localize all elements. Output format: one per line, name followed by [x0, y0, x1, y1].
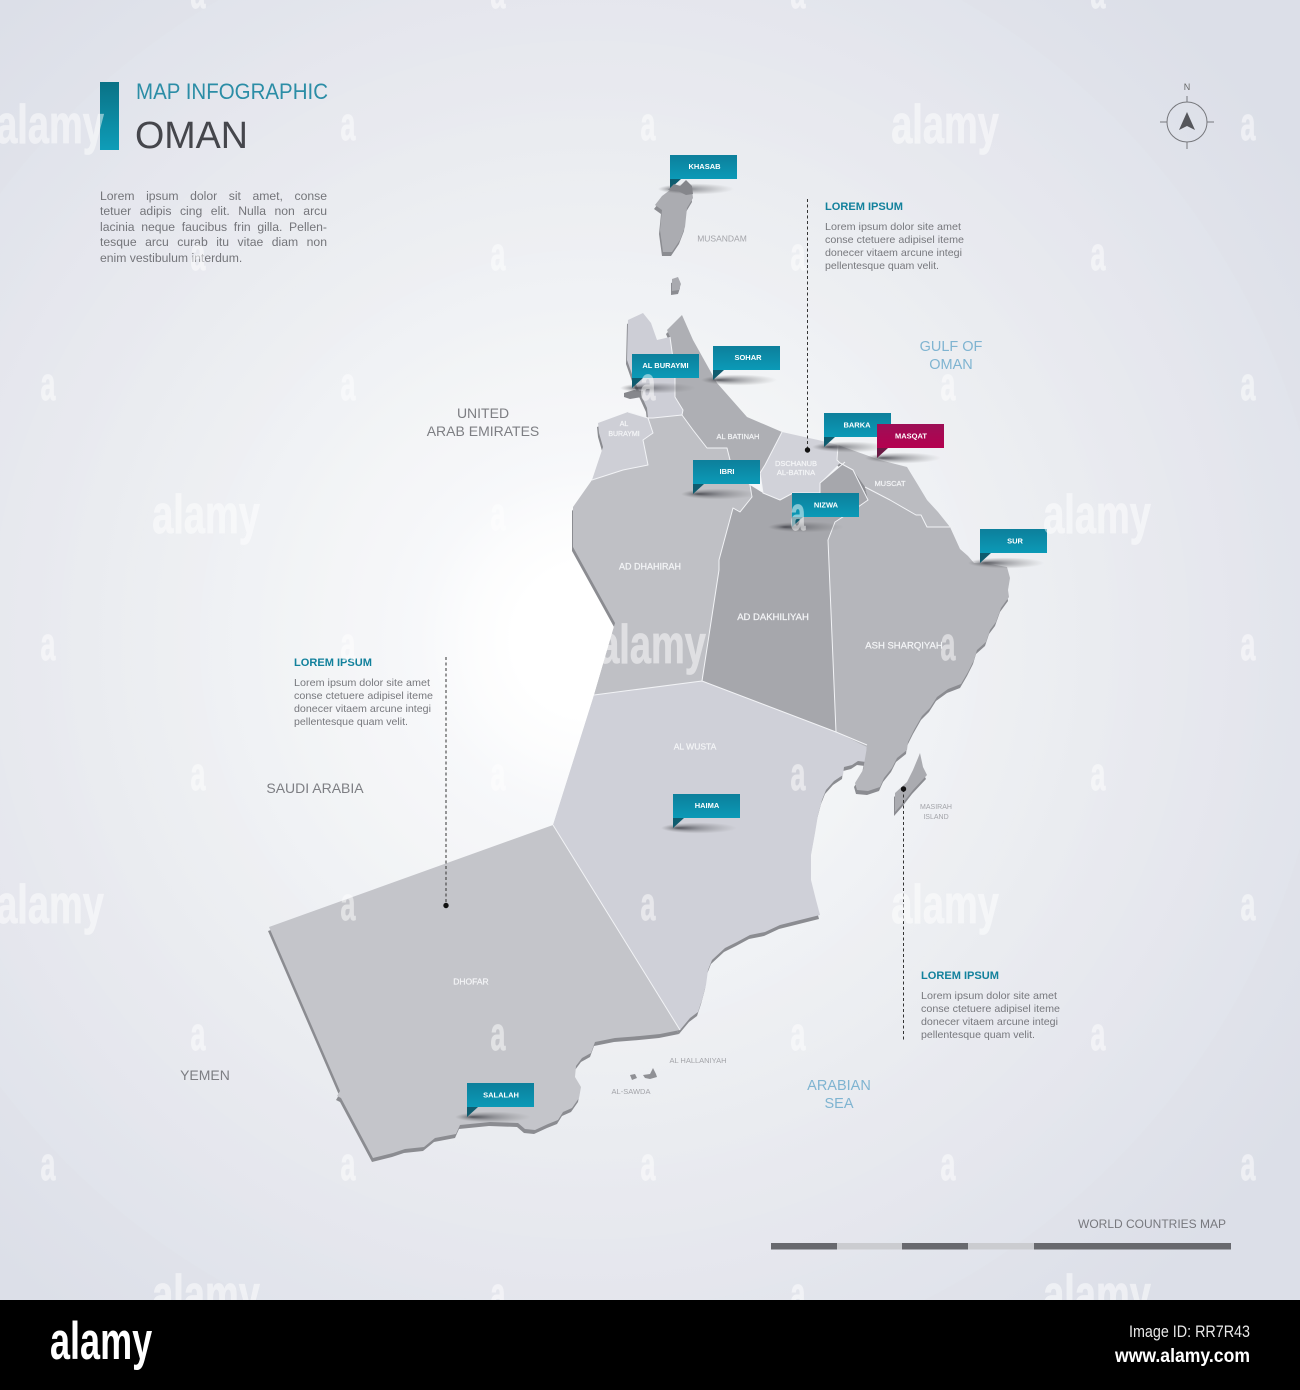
watermarks: a	[191, 1008, 206, 1061]
callout text: north: pellentesque quam velit.	[825, 261, 939, 272]
watermarks: a	[341, 358, 356, 411]
watermarks: a	[341, 878, 356, 931]
sea labels: OMAN	[929, 357, 973, 373]
pin: Barka: BARKA	[843, 420, 871, 430]
callout leader: north	[805, 199, 810, 453]
sea labels: ARABIAN	[807, 1078, 871, 1094]
watermarks: a	[641, 878, 656, 931]
island: Musandam south	[672, 277, 681, 291]
region: Al Buraymi	[592, 412, 653, 480]
watermarks: a	[791, 1268, 806, 1321]
watermarks: alamy	[891, 874, 999, 936]
pin: Sohar	[701, 346, 780, 386]
Musandam top detail	[668, 180, 693, 195]
region labels	[453, 421, 943, 986]
watermarks: a	[941, 618, 956, 671]
watermarks: a	[641, 98, 656, 151]
region: Ad Dhahirah	[573, 415, 752, 695]
callout text: north	[825, 201, 964, 272]
icon: compass: N	[1184, 82, 1190, 92]
callout text: north: donecer vitaem arcune integi	[825, 248, 962, 259]
watermarks: a	[341, 1138, 356, 1191]
watermarks: a	[341, 98, 356, 151]
watermarks: a	[641, 1138, 656, 1191]
region labels: BURAYMI	[608, 431, 640, 438]
watermarks: a	[791, 488, 806, 541]
region labels: AL	[620, 421, 628, 428]
callout text: south: donecer vitaem arcune integi	[921, 1017, 1058, 1028]
pin: Al Buraymi: AL BURAYMI	[642, 361, 689, 370]
watermarks: a	[791, 228, 806, 281]
icon: compass	[1160, 82, 1214, 149]
callout text: west	[294, 657, 433, 728]
subtitle: MAP INFOGRAPHIC	[136, 79, 328, 104]
watermarks: a	[941, 1138, 956, 1191]
region: Muscat	[837, 445, 950, 527]
footer image id: Image ID: RR7R43	[1129, 1322, 1250, 1341]
watermarks: alamy	[891, 94, 999, 156]
region labels: AL BATINAH	[717, 432, 759, 441]
intro paragraph: Lorem ipsum dolor sit amet, conse	[100, 188, 327, 202]
watermarks: a	[491, 228, 506, 281]
footer bar	[0, 1300, 1300, 1390]
watermarks: a	[1241, 618, 1256, 671]
region labels: DSCHANUB	[775, 459, 817, 468]
map extrusion shadow	[268, 190, 1009, 1162]
watermarks: alamy	[1043, 1264, 1151, 1326]
pin: Masqat (capital)	[865, 424, 944, 464]
neighbouring country labels	[180, 405, 539, 1083]
watermarks: alamy	[152, 484, 260, 546]
region labels: AD DHAHIRAH	[619, 562, 681, 572]
region: Ad Dakhiliyah	[702, 462, 868, 732]
external region labels: AL-SAWDA	[612, 1087, 650, 1096]
watermarks: a	[1241, 878, 1256, 931]
callout leader: west	[443, 657, 449, 908]
callout text: north: LOREM IPSUM	[825, 201, 903, 213]
callout text: west: donecer vitaem arcune integi	[294, 704, 431, 715]
watermarks: a	[41, 618, 56, 671]
region labels: ASH SHARQIYAH	[865, 640, 943, 652]
external region labels: MUSANDAM	[697, 234, 747, 244]
watermarks: a	[791, 748, 806, 801]
footer logo: alamy	[50, 1311, 152, 1371]
watermarks: a	[491, 1268, 506, 1321]
watermarks: a	[791, 1008, 806, 1061]
neighbouring country labels: YEMEN	[180, 1067, 230, 1083]
watermarks: a	[341, 618, 356, 671]
pin: Nizwa	[768, 493, 859, 532]
watermarks: a	[1091, 748, 1106, 801]
region labels: MUSCAT	[874, 479, 906, 488]
intro paragraph	[100, 188, 327, 264]
pin: Masqat (capital): MASQAT	[895, 432, 927, 440]
title accent bar	[100, 82, 119, 150]
intro paragraph: tetuer adipis cing elit. Nulla non arcu	[100, 204, 327, 218]
title: OMAN	[135, 115, 248, 157]
watermarks: a	[1241, 358, 1256, 411]
callout text: west: pellentesque quam velit.	[294, 717, 408, 728]
external region labels: MASIRAH	[920, 804, 952, 811]
region: Dhofar	[269, 825, 680, 1158]
pin: Haima: HAIMA	[695, 801, 720, 810]
watermarks: a	[41, 1138, 56, 1191]
pin: Khasab	[658, 155, 737, 194]
pin: Sur: SUR	[1007, 536, 1023, 546]
callout text: south: LOREM IPSUM	[921, 970, 999, 982]
region: northern enclave	[627, 313, 683, 418]
external region labels: ISLAND	[923, 814, 949, 821]
intro paragraph: tesque arcu curab itu vitae diam non	[100, 235, 327, 249]
region: Al Batinah	[667, 315, 782, 473]
watermarks: a	[1241, 1138, 1256, 1191]
pin: Sohar: SOHAR	[734, 353, 762, 362]
pin: Al Buraymi	[620, 354, 699, 394]
pin: Barka	[812, 413, 891, 452]
neighbouring country labels: UNITED	[457, 405, 509, 421]
watermarks: alamy	[598, 614, 706, 676]
external region labels	[612, 234, 952, 1096]
pin: Haima	[661, 794, 740, 834]
region labels: AD DAKHILIYAH	[737, 612, 809, 623]
islands: Al Hallaniyah and Al-Sawda	[630, 1068, 657, 1080]
callout text: south	[921, 970, 1060, 1041]
neighbouring country labels: SAUDI ARABIA	[266, 780, 364, 796]
pin: Nizwa: NIZWA	[814, 500, 839, 510]
watermarks: a	[491, 748, 506, 801]
callout text: south: pellentesque quam velit.	[921, 1030, 1035, 1041]
watermarks: a	[191, 228, 206, 281]
region: South Al Batinah	[760, 432, 840, 500]
callout text: west: LOREM IPSUM	[294, 657, 372, 669]
scale bar	[771, 1217, 1231, 1250]
pin: Salalah	[455, 1083, 534, 1122]
watermarks: alamy	[152, 1264, 260, 1326]
pin: Ibri	[681, 460, 760, 500]
watermarks: a	[1091, 228, 1106, 281]
island: Masirah	[895, 753, 927, 812]
intro paragraph: lacinia neque faucibus frin gilla. Pellen-	[100, 220, 327, 234]
region labels: AL WUSTA	[674, 742, 717, 752]
callout leader: south	[901, 786, 906, 1040]
callout text: west: conse ctetuere adipisel iteme	[294, 691, 433, 702]
pin: Ibri: IBRI	[720, 467, 734, 476]
sea labels: GULF OF	[920, 339, 983, 355]
intro paragraph: enim vestibulum interdum.	[100, 250, 242, 264]
region: Musandam	[655, 186, 693, 252]
watermarks: a	[491, 1008, 506, 1061]
neighbouring country labels: ARAB EMIRATES	[427, 423, 539, 439]
pin: Sur	[968, 529, 1047, 568]
callout text: west: Lorem ipsum dolor site amet	[294, 678, 430, 689]
sea labels: SEA	[824, 1096, 854, 1112]
watermarks: a	[41, 358, 56, 411]
footer url: www.alamy.com	[1114, 1346, 1250, 1367]
island: dark islet	[624, 390, 643, 399]
callout text: north: Lorem ipsum dolor site amet	[825, 222, 961, 233]
watermarks: a	[1091, 1008, 1106, 1061]
callout text: north: conse ctetuere adipisel iteme	[825, 235, 964, 246]
pin: Salalah: SALALAH	[483, 1090, 519, 1100]
region: Ash Sharqiyah	[828, 487, 1010, 791]
callout text: south: Lorem ipsum dolor site amet	[921, 991, 1057, 1002]
map of Oman regions	[269, 186, 1010, 1158]
region: Al Wusta	[553, 681, 867, 1030]
sea labels	[807, 339, 983, 1112]
watermarks: a	[491, 488, 506, 541]
watermarks: alamy	[1043, 484, 1151, 546]
watermarks: a	[641, 358, 656, 411]
region labels: DHOFAR	[453, 976, 489, 986]
watermarks: a	[1241, 98, 1256, 151]
watermarks: a	[941, 358, 956, 411]
scale bar: WORLD COUNTRIES MAP	[1078, 1217, 1226, 1231]
region labels: AL-BATINA	[777, 468, 815, 477]
callout text: south: conse ctetuere adipisel iteme	[921, 1004, 1060, 1015]
external region labels: AL HALLANIYAH	[669, 1056, 727, 1065]
watermarks: a	[191, 748, 206, 801]
pin: Khasab: KHASAB	[688, 162, 721, 171]
